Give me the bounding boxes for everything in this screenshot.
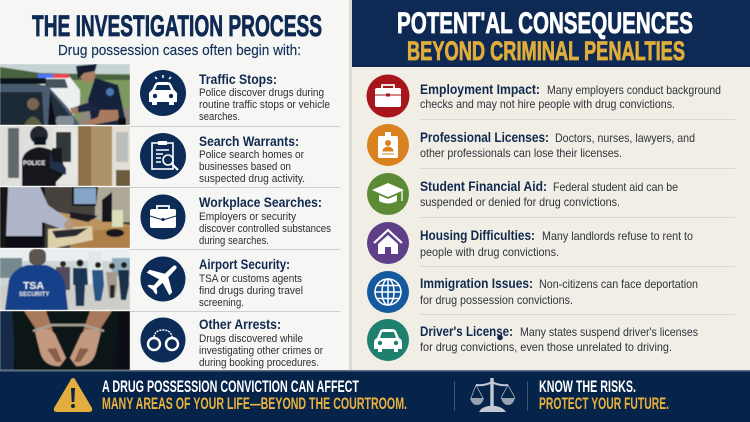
icon: scales of justice (470, 378, 515, 412)
text: airport security: screening. (199, 297, 244, 309)
icon: red briefcase (366, 74, 410, 118)
text: airport security: TSA or customs agents (199, 273, 302, 285)
photo: handcuffed hands (0, 311, 130, 370)
row: traffic stops (140, 70, 330, 123)
photo: airport security: SECURITY (19, 292, 49, 298)
icon: orange badge (367, 124, 409, 166)
text: professional licenses (420, 129, 695, 160)
icon: purple house (367, 222, 409, 264)
panel: the investigation process (0, 10, 340, 370)
text: driver's license: Driver's License: (420, 323, 513, 339)
text: search warrants: suspected drug activity. (199, 173, 305, 185)
photo: traffic stop (0, 64, 130, 125)
text: search warrants (199, 133, 305, 185)
text: employment impact: Employment Impact: (420, 81, 540, 97)
text: other arrests: Drugs discovered while (199, 333, 303, 345)
row dividers (130, 126, 340, 312)
text: student financial aid: suspended or denied for drug convictions. (420, 195, 620, 209)
row: professional licenses (367, 124, 695, 166)
text: housing difficulties: people with drug convictions. (420, 245, 559, 259)
text: professional licenses: Doctors, nurses, lawyers, and (555, 131, 695, 145)
text: other arrests: Other Arrests: (199, 316, 281, 332)
text: search warrants: Police search homes or (199, 149, 304, 161)
text: immigration issues: Immigration Issues: (420, 275, 533, 291)
text: immigration issues (420, 275, 698, 307)
text: driver's license (420, 323, 698, 354)
row: driver's license (367, 319, 698, 361)
text: airport security (199, 256, 303, 309)
text: housing difficulties: Many landlords refuse to rent to (542, 229, 693, 243)
text: airport security: find drugs during travel (199, 285, 303, 297)
text: traffic stops: Traffic Stops: (199, 71, 277, 87)
text: search warrants: businesses based on (199, 161, 291, 173)
icon: green graduation cap (367, 173, 409, 215)
text: workplace searches: during searches. (199, 235, 269, 247)
text: professional licenses: other professionals can lose their licenses. (420, 146, 622, 160)
footer call to action (539, 378, 669, 413)
row: employment impact (366, 74, 721, 118)
photo: workplace search (0, 187, 130, 248)
text: student financial aid (420, 178, 678, 209)
footer call to action: PROTECT YOUR FUTURE. (539, 395, 669, 413)
row: search warrants (140, 133, 305, 185)
text: professional licenses: Professional Licenses: (420, 129, 549, 145)
text: student financial aid: Student Financial Aid: (420, 178, 547, 194)
row: other arrests (140, 316, 323, 369)
text: workplace searches: discover controlled substances (199, 223, 331, 235)
text: housing difficulties (420, 227, 693, 259)
text: workplace searches: Workplace Searches: (199, 194, 322, 210)
photo: airport security (0, 249, 130, 310)
photo: airport security: TSA (23, 280, 44, 292)
text: other arrests: investigating other crimes or (199, 345, 323, 357)
icon: teal car (367, 319, 409, 361)
text: housing difficulties: Housing Difficulties: (420, 227, 535, 243)
left heading: THE INVESTIGATION PROCESS (32, 10, 322, 43)
photo: search warrant: POLICE (23, 161, 45, 167)
icon: blue globe (367, 271, 409, 313)
text: traffic stops (199, 71, 330, 123)
text: immigration issues: Non-citizens can face deportation (539, 277, 698, 291)
row: immigration issues (367, 271, 698, 313)
icon: document with magnifier (140, 133, 186, 179)
text: workplace searches (199, 194, 331, 247)
text: other arrests (199, 316, 323, 369)
text: traffic stops: routine traffic stops or vehicle (199, 99, 330, 111)
text: traffic stops: Police discover drugs during (199, 87, 324, 99)
text: other arrests: during booking procedures. (199, 357, 319, 369)
text: traffic stops: searches. (199, 111, 240, 123)
footer message (102, 378, 407, 413)
icon: handcuffs (140, 318, 186, 362)
icon: airplane (131, 247, 195, 311)
icon: police car (140, 70, 186, 116)
text: driver's license: for drug convictions, even those unrelated to driving. (420, 340, 672, 354)
photo: search warrant (0, 126, 130, 186)
text: employment impact (420, 81, 721, 111)
row: housing difficulties (367, 222, 693, 264)
icon: briefcase (140, 194, 186, 240)
text: workplace searches: Employers or security (199, 211, 296, 223)
text: employment impact: checks and may not hire people with drug convictions. (420, 97, 675, 111)
icon: warning triangle (54, 378, 92, 412)
consequences header band (352, 0, 750, 67)
panel: potential consequences (349, 0, 750, 371)
text: student financial aid: Federal student aid can be (553, 180, 678, 194)
footer message: A DRUG POSSESSION CONVICTION CAN AFFECT (102, 378, 359, 396)
row: student financial aid (367, 173, 678, 215)
text: immigration issues: for drug possession convictions. (420, 293, 573, 307)
footer call to action: KNOW THE RISKS. (539, 378, 636, 396)
footer message: MANY AREAS OF YOUR LIFE—BEYOND THE COURTROOM. (102, 395, 407, 413)
row: airport security (131, 247, 303, 311)
text: search warrants: Search Warrants: (199, 133, 299, 149)
left subheading: Drug possession cases often begin with: (58, 42, 301, 59)
footer banner (0, 370, 750, 422)
text: employment impact: Many employers conduct background (547, 83, 721, 97)
text: driver's license: Many states suspend driver's licenses (520, 325, 698, 339)
row: workplace searches (140, 194, 331, 247)
text: airport security: Airport Security: (199, 256, 290, 272)
